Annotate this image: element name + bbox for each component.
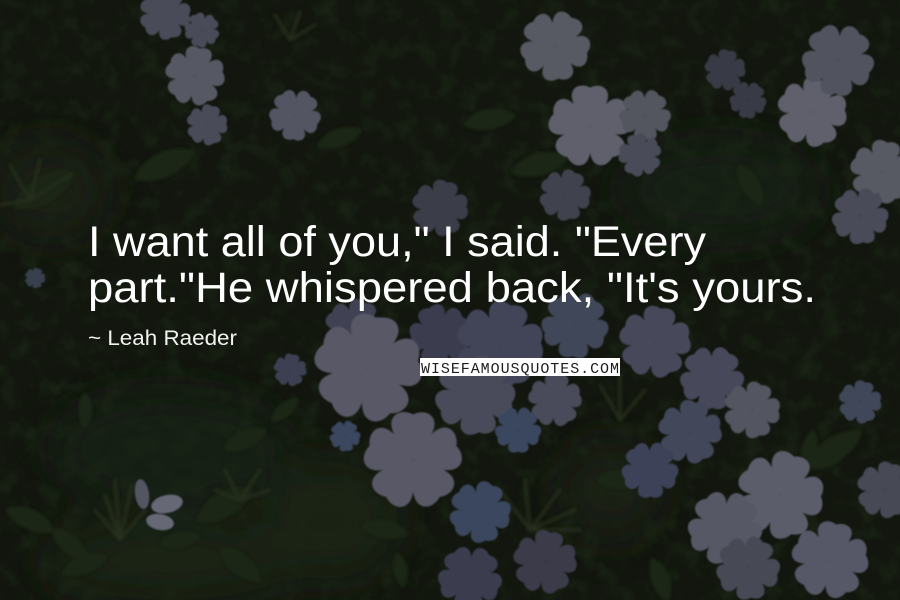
- author attribution: ~ Leah Raeder: [88, 327, 237, 350]
- quote text: I want all of you," I said. "Every: [88, 218, 707, 266]
- quote text: [88, 218, 816, 312]
- green spiky tufts: [0, 12, 645, 540]
- quote text: part."He whispered back, "It's yours.: [88, 264, 816, 312]
- watermark logo: WISEFAMOUSQUOTES.COM: [421, 361, 619, 378]
